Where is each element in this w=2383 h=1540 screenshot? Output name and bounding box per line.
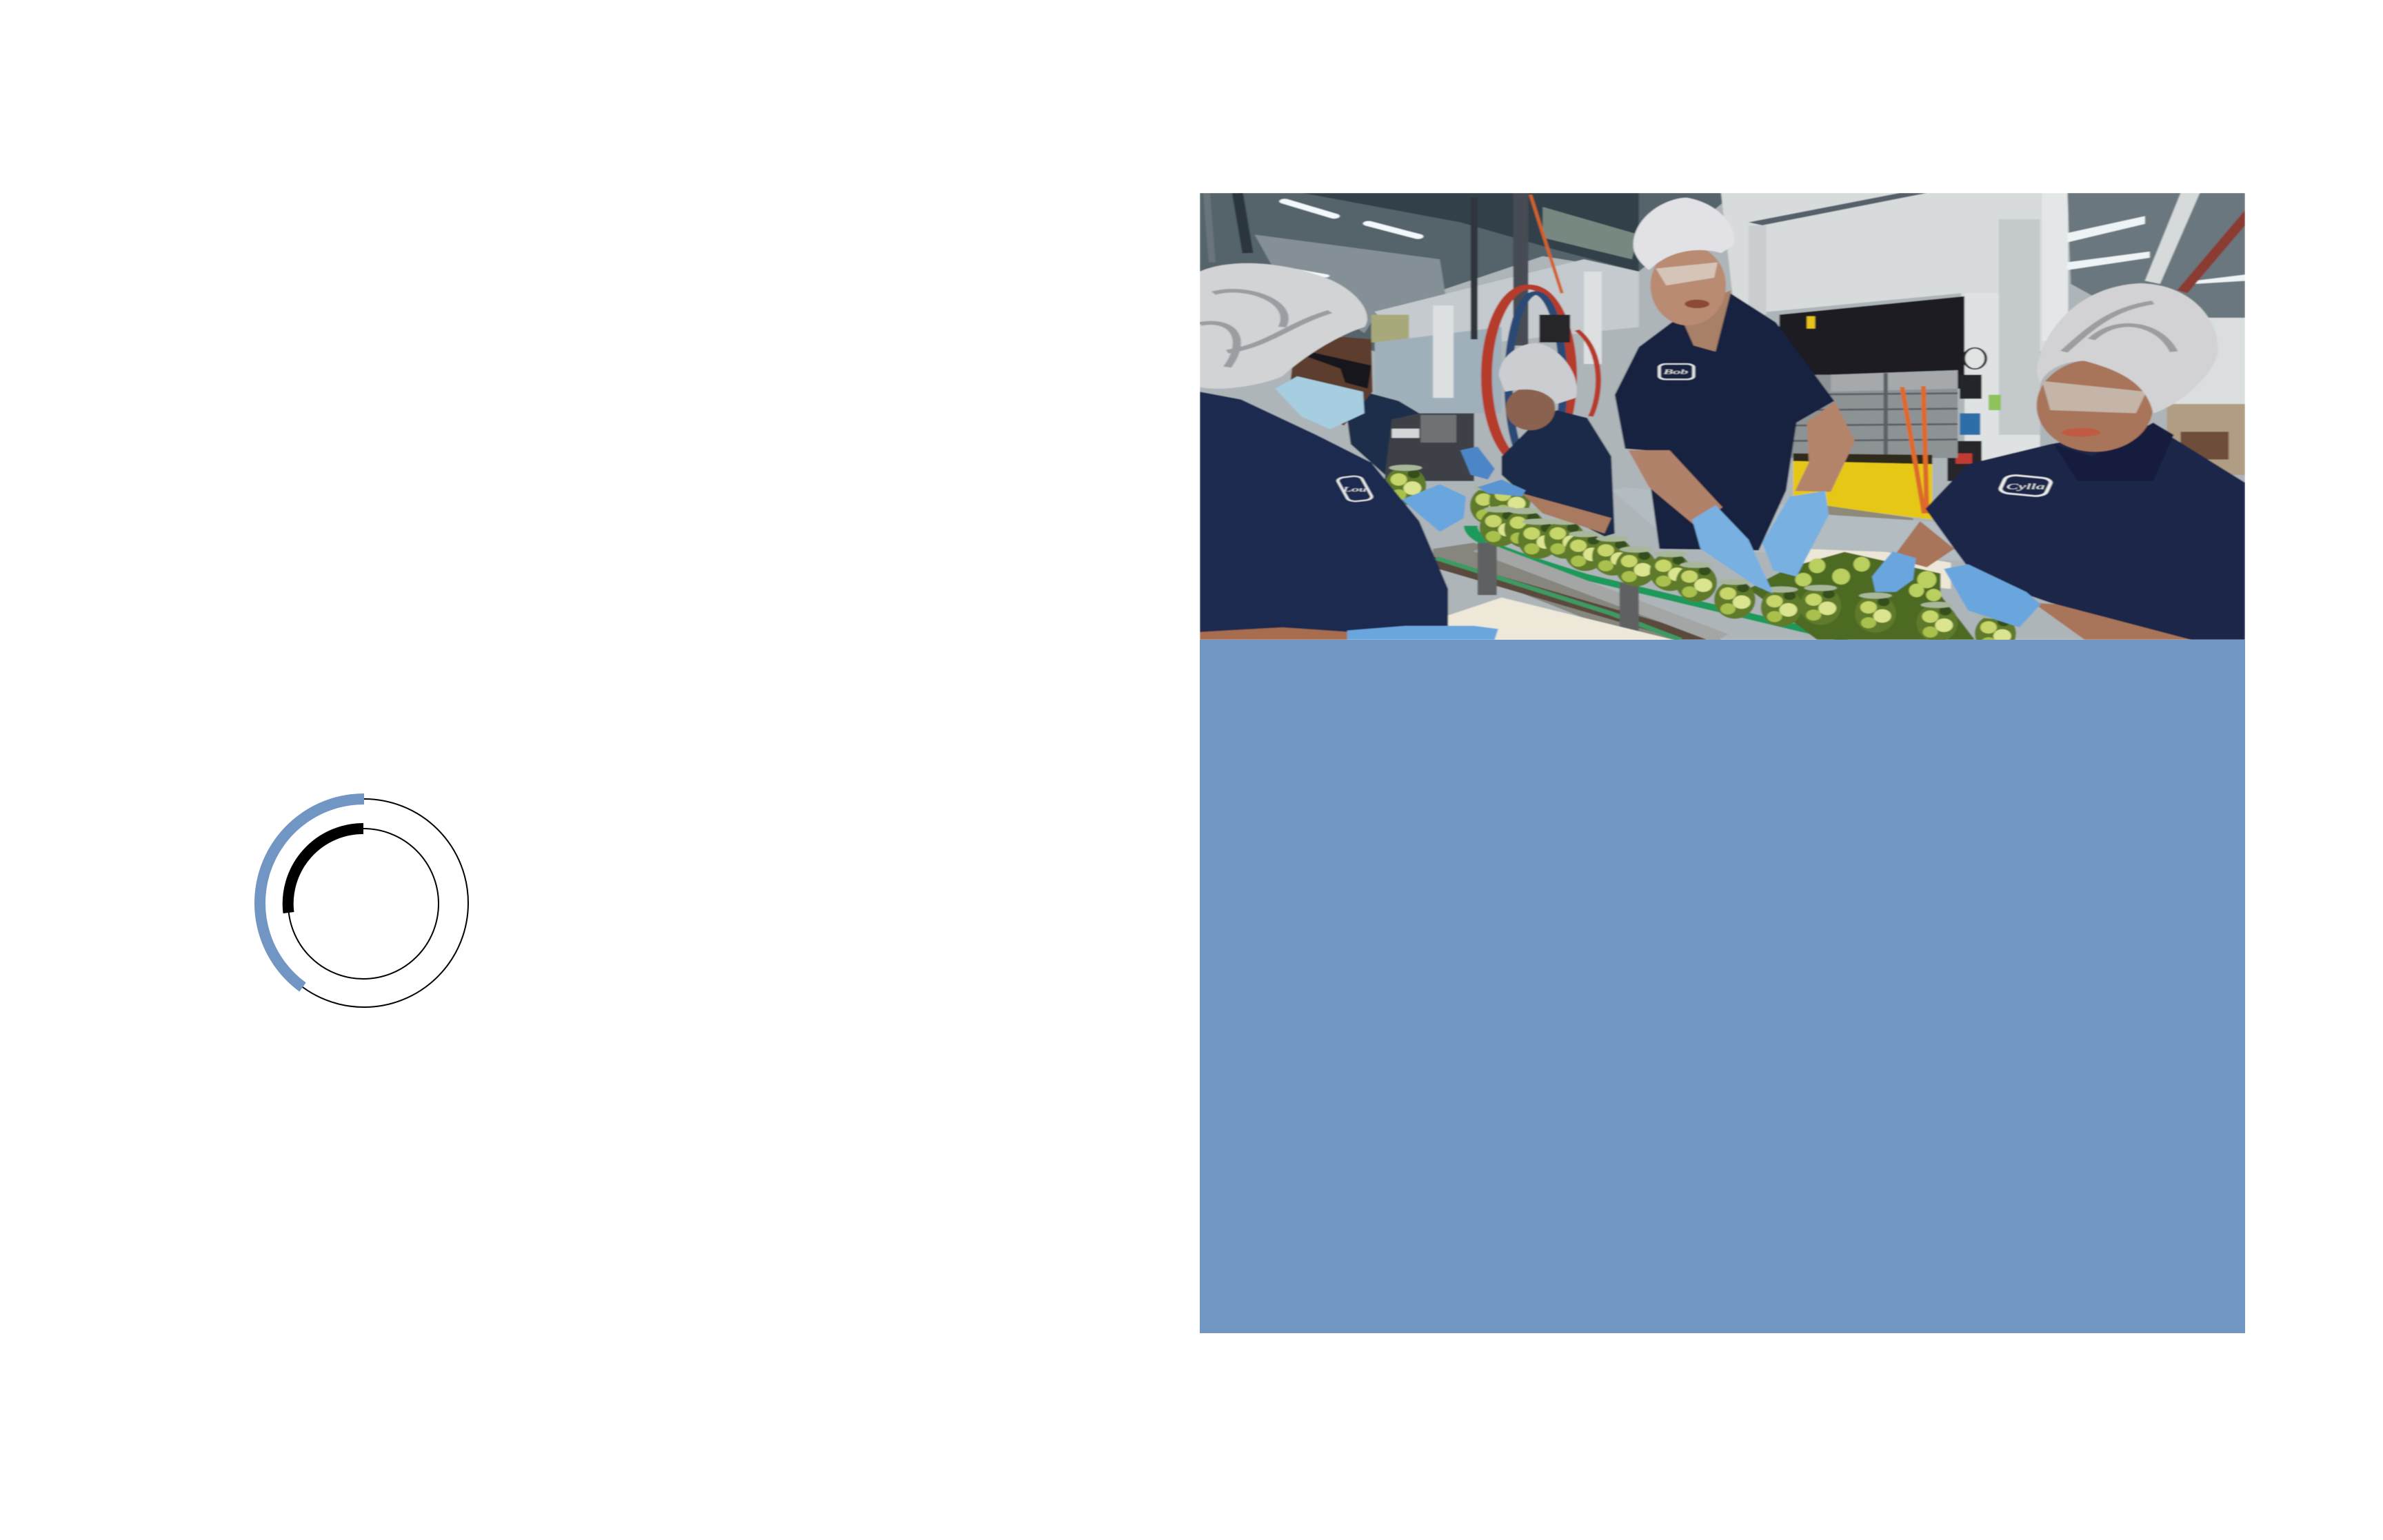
warehouse wall and doorway (1721, 193, 2068, 481)
factory ceiling, left (1200, 193, 1735, 414)
white tub, centre right (1803, 549, 1951, 589)
chart: concentric progress rings (254, 793, 469, 1008)
pickles in tub and loose slices (1749, 552, 1975, 640)
floor (1611, 487, 1975, 561)
ceiling lights, left (1285, 201, 1418, 276)
photo: workers packing pickles on a production line (1200, 193, 2245, 640)
worker in background (1347, 392, 1419, 475)
worker: man in the centre, name badge Bob: Bob (1664, 368, 1688, 376)
inner ring black arc (288, 829, 363, 913)
worker: woman at left with mask, name badge Lou: Lou (1343, 485, 1367, 493)
worker: man in the centre, name badge Bob (1615, 198, 1855, 594)
conveyor with green rail (1433, 526, 1848, 640)
worker: woman at right, name badge Cylla: Cylla (2007, 483, 2045, 491)
panel: solid blue block below photo (1200, 640, 2245, 1333)
jars of pickles (1385, 465, 2016, 653)
white tub, bottom left (1419, 598, 1673, 640)
ceiling and beams, upper right (2067, 193, 2245, 475)
coiled red air hoses (1487, 287, 1598, 472)
outer ring blue arc (260, 799, 364, 987)
worker: woman at right, name badge Cylla (1872, 283, 2245, 640)
yellow cart (1793, 386, 1932, 527)
stacked pallets of glass jars (1783, 370, 1958, 458)
worker: woman at left with mask, name badge Lou (1200, 263, 1498, 640)
outer ring track (260, 799, 468, 1007)
worker: woman at centre back (1460, 343, 1615, 536)
background machinery behind left worker (1385, 414, 1474, 481)
inner ring track (288, 829, 439, 979)
